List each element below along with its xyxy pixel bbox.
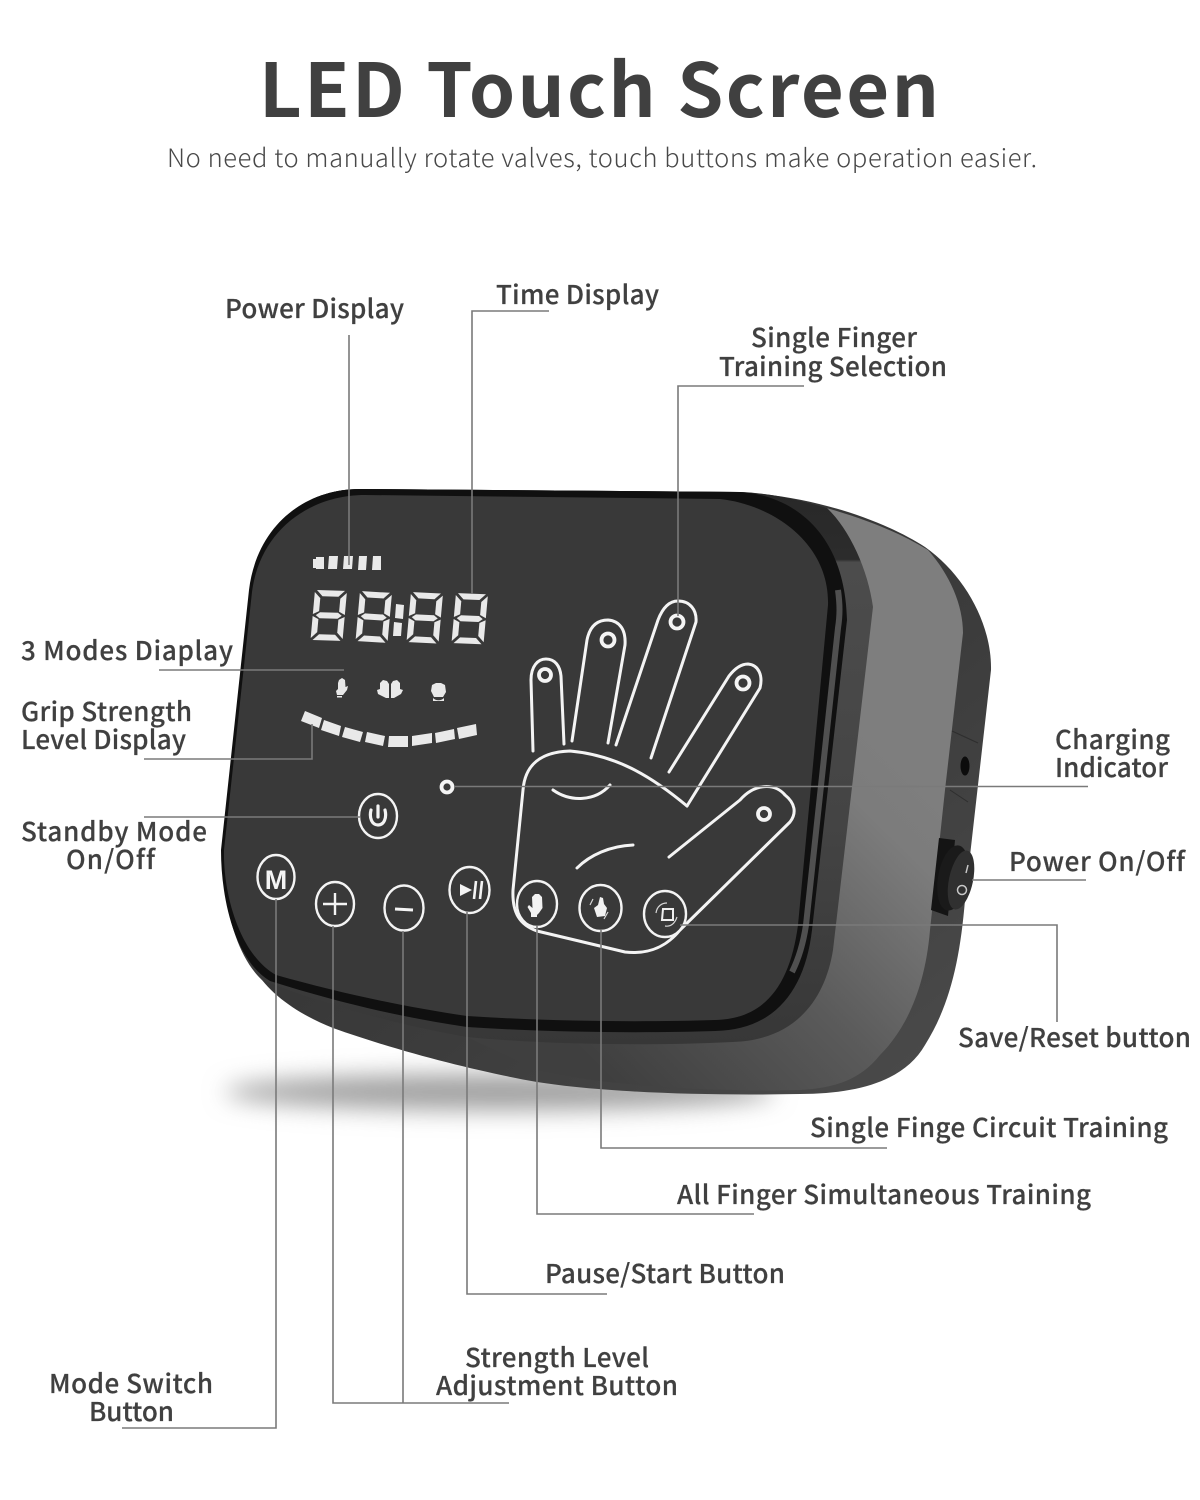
icon: two hands (377, 680, 403, 698)
device body shell (222, 489, 991, 1094)
pause start button (450, 867, 490, 913)
digit 2 (356, 591, 392, 643)
label: Charging Indicator: Charging (1055, 720, 1170, 757)
label: Save/Reset button: Save/Reset button (958, 1018, 1191, 1055)
label: Grip Strength Level Display (21, 692, 192, 757)
middle finger (616, 601, 696, 758)
label: Mode Switch Button (49, 1364, 213, 1429)
label: Time Display: Time Display (496, 275, 659, 312)
time display 88:88 (310, 590, 488, 644)
three mode icons (336, 678, 446, 701)
port seam lines (950, 731, 978, 802)
charging jack (960, 756, 970, 776)
label: Single Finger Training Selection: Single Finger (751, 318, 917, 355)
ring finger (572, 620, 625, 743)
leader: Power On/Off (972, 879, 1086, 881)
label: Strength Level Adjustment Button (436, 1338, 678, 1403)
leader: Time Display (472, 311, 549, 594)
palm crease upper (553, 785, 610, 798)
battery power display (313, 556, 381, 570)
leader: Standby Mode (144, 816, 360, 818)
device: hand rehabilitation controller (221, 489, 991, 1110)
leader: Charging Indicator (454, 786, 1088, 788)
mode button: M (265, 865, 287, 895)
digit 3 (406, 592, 443, 644)
leader: Pause/Start Button (467, 912, 607, 1294)
digit 4 (452, 593, 488, 644)
pinky finger (531, 659, 564, 751)
label: 3 Modes Diaplay: 3 Modes Diaplay (21, 631, 233, 668)
bezel highlight ring (792, 590, 840, 972)
label: Standby Mode On/Off: On/Off (66, 840, 156, 877)
leader: Single Finger Training Selection (678, 386, 804, 616)
light side band (467, 501, 963, 1090)
label: Mode Switch Button: Mode Switch (49, 1364, 213, 1401)
label: Mode Switch Button: Button (89, 1392, 174, 1429)
leader: Mode Switch (122, 899, 276, 1428)
all finger training button (517, 881, 557, 927)
icon: gripped fist (431, 683, 446, 701)
mode button (258, 855, 294, 899)
label: Grip Strength Level Display: Level Display (21, 720, 186, 757)
icon: single hand (336, 678, 348, 698)
black glass edge (221, 489, 847, 1032)
plus button (316, 882, 354, 926)
colon (393, 604, 404, 636)
leader: Grip Strength (144, 724, 312, 759)
palm crease lower (577, 845, 633, 868)
touch screen panel (224, 495, 828, 1021)
label: Power Display: Power Display (225, 289, 404, 326)
power rocker switch (931, 838, 979, 916)
label: Single Finge Circuit Training: Single Finge Circuit Training (810, 1108, 1168, 1145)
label: Grip Strength Level Display: Grip Strength (21, 692, 192, 729)
label: Single Finger Training Selection (719, 318, 947, 384)
hand outline diagram (513, 601, 794, 953)
single finger circuit button (580, 885, 622, 931)
label: Standby Mode On/Off: Standby Mode (21, 812, 207, 849)
leader: Power Display (348, 335, 350, 565)
label: Charging Indicator: Indicator (1055, 748, 1168, 785)
leader: 3 Modes Diaplay (159, 669, 344, 671)
title: LED Touch Screen (259, 32, 939, 139)
label: Standby Mode On/Off (21, 812, 207, 877)
label: Charging Indicator (1055, 720, 1170, 785)
leader: All Finger Simultaneous Training (537, 926, 754, 1214)
charging indicator (442, 782, 452, 792)
floor shadow (225, 1074, 775, 1110)
label: Single Finger Training Selection: Training Selection (719, 347, 947, 384)
leader: Strength Level Adjustment (333, 926, 509, 1403)
label: Pause/Start Button: Pause/Start Button (545, 1254, 785, 1291)
minus button (384, 886, 424, 930)
outer bezel (222, 489, 873, 1044)
leader: Save/Reset (680, 925, 1057, 1022)
label: Strength Level Adjustment Button: Adjustment Button (436, 1366, 678, 1403)
side panel with jack and switch (931, 731, 979, 916)
index finger (669, 664, 761, 806)
label: Strength Level Adjustment Button: Strength Level (465, 1338, 649, 1375)
standby button (359, 794, 397, 838)
grip strength level bar (301, 711, 477, 747)
save reset button (644, 891, 686, 937)
finger touch points (539, 616, 770, 820)
digit 1 (310, 590, 347, 641)
leader: Single Finge Circuit Training (601, 930, 887, 1148)
subtitle: No need to manually rotate valves, touch buttons make operation easier. (167, 138, 1037, 175)
label: All Finger Simultaneous Training: All Finger Simultaneous Training (677, 1175, 1091, 1212)
palm and thumb outline (513, 751, 794, 953)
label: Power On/Off: Power On/Off (1009, 842, 1186, 879)
